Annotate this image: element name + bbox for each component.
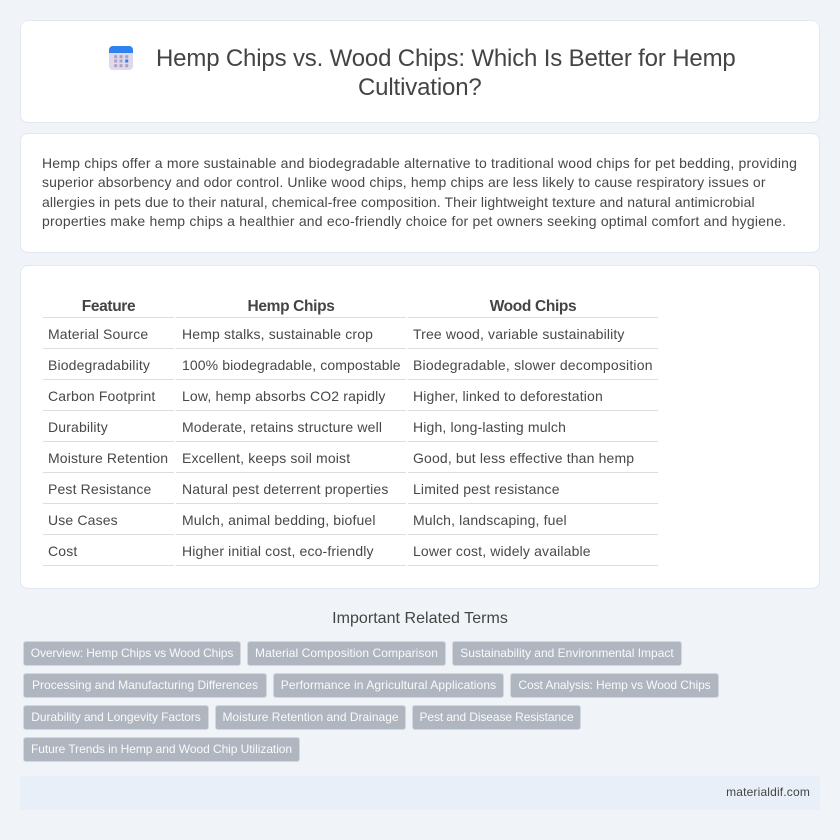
row: Carbon Footprint: Low, hemp absorbs CO2 rapidly (182, 388, 386, 404)
intro text line 4: properties make hemp chips a healthier and eco-friendly choice for pet owners seeking optimal comfort and hygiene. (42, 213, 786, 229)
row: Pest Resistance: Pest Resistance (48, 481, 151, 497)
row: Pest Resistance: Natural pest deterrent properties (182, 481, 389, 497)
tag: material composition (247, 641, 446, 666)
intro text line 2: superior absorbency and odor control. Unlike wood chips, hemp chips are less likely to cause respiratory issues or (42, 174, 766, 190)
row: Material Source: Hemp stalks, sustainable crop (182, 326, 373, 342)
tag: overview (23, 641, 241, 666)
tag: cost analysis (510, 673, 719, 698)
tag: sustainability: Sustainability and Environmental Impact (460, 646, 674, 660)
row: Moisture Retention (43, 450, 658, 473)
related terms heading: Important Related Terms (332, 610, 508, 627)
row: Use Cases (43, 512, 658, 535)
row: Material Source: Material Source (48, 326, 148, 342)
row: Cost: Higher initial cost, eco-friendly (182, 543, 374, 559)
row: Durability (43, 419, 658, 442)
row: Biodegradability: 100% biodegradable, compostable (182, 357, 401, 373)
row: Biodegradability: Biodegradability (48, 357, 150, 373)
row: Cost (43, 543, 658, 566)
icon: calendar (109, 46, 133, 70)
row: Use Cases: Mulch, animal bedding, biofuel (182, 512, 376, 528)
row: Material Source: Tree wood, variable sustainability (413, 326, 625, 342)
row: Biodegradability: Biodegradable, slower decomposition (413, 357, 653, 373)
tag: future trends: Future Trends in Hemp and Wood Chip Utilization (31, 742, 292, 756)
tag: moisture (215, 705, 406, 730)
row: Pest Resistance (43, 481, 658, 504)
tag: performance: Performance in Agricultural Applications (281, 678, 496, 692)
related terms section (23, 610, 719, 762)
row: Carbon Footprint: Higher, linked to deforestation (413, 388, 603, 404)
tag: moisture: Moisture Retention and Drainage (222, 710, 399, 724)
row: Carbon Footprint: Carbon Footprint (48, 388, 155, 404)
title: Hemp Chips vs. Wood Chips: Which Is Better for Hemp (156, 45, 736, 72)
intro text line 1: Hemp chips offer a more sustainable and biodegradable alternative to traditional wood chips for pet bedding, providing (42, 155, 797, 171)
intro text line 3: allergies in pets due to their natural, chemical-free composition. Their lightweight texture and natural antimicrobial (42, 194, 755, 210)
row: Cost: Lower cost, widely available (413, 543, 591, 559)
tag: durability: Durability and Longevity Factors (31, 710, 201, 724)
row: Carbon Footprint (43, 388, 658, 411)
row: Moisture Retention: Good, but less effective than hemp (413, 450, 634, 466)
tag: durability (23, 705, 209, 730)
tag: future trends (23, 737, 300, 762)
row: Durability: Durability (48, 419, 108, 435)
row: Use Cases: Mulch, landscaping, fuel (413, 512, 567, 528)
tag: sustainability (452, 641, 682, 666)
tag: material composition: Material Composition Comparison (255, 646, 438, 660)
header panel (20, 20, 820, 123)
footer bar (20, 776, 820, 810)
row: Durability: Moderate, retains structure well (182, 419, 382, 435)
header: Wood Chips: Wood Chips (490, 298, 576, 315)
comparison table (43, 298, 658, 566)
row: Pest Resistance: Limited pest resistance (413, 481, 560, 497)
row: Material Source (43, 326, 658, 349)
tag: cost analysis: Cost Analysis: Hemp vs Wood Chips (518, 678, 711, 692)
tag: processing: Processing and Manufacturing Differences (32, 678, 258, 692)
row: Use Cases: Use Cases (48, 512, 118, 528)
footer source: materialdif.com (726, 785, 810, 799)
tag: processing (23, 673, 267, 698)
row: Biodegradability (43, 357, 658, 380)
header: Feature: Feature (82, 298, 135, 315)
row: Moisture Retention: Moisture Retention (48, 450, 168, 466)
header: Hemp Chips: Hemp Chips (248, 298, 334, 315)
tag: pest and disease: Pest and Disease Resistance (419, 710, 574, 724)
tag: pest and disease (412, 705, 581, 730)
row: Cost: Cost (48, 543, 77, 559)
title second line: Cultivation? (358, 74, 482, 101)
row: Durability: High, long-lasting mulch (413, 419, 566, 435)
intro panel (20, 133, 820, 253)
row: Moisture Retention: Excellent, keeps soil moist (182, 450, 350, 466)
tag: performance (273, 673, 504, 698)
table panel (20, 265, 820, 589)
tag: overview: Overview: Hemp Chips vs Wood Chips (31, 646, 233, 660)
